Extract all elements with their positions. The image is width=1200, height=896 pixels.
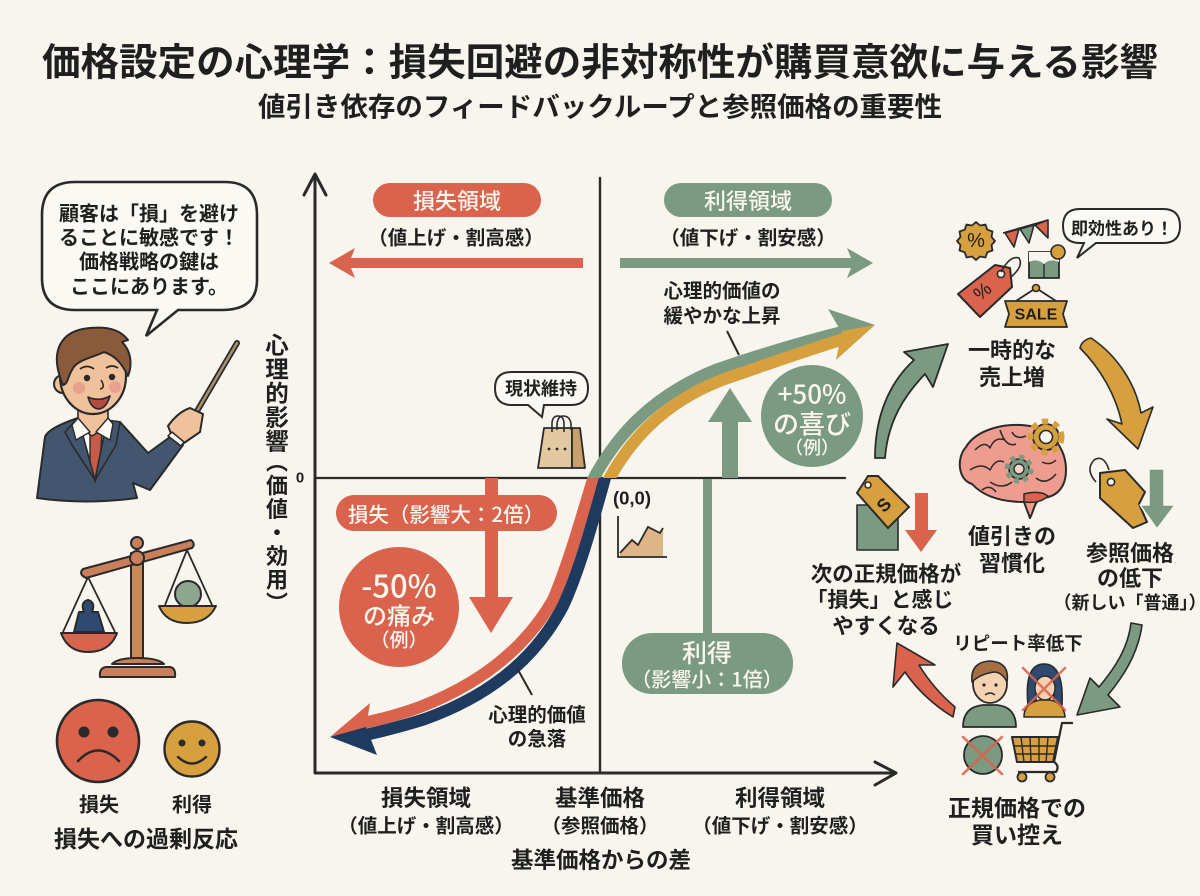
icon: happy face bbox=[164, 722, 220, 776]
speech bubble: immediate effect: 即効性あり！ bbox=[1071, 214, 1173, 240]
gain impact label: （影響小：1倍） bbox=[631, 664, 783, 692]
label: holding back at regular price bbox=[948, 789, 1086, 850]
value curve: gain side bbox=[590, 309, 875, 488]
callout: sharp fall: 心理的価値 bbox=[488, 698, 586, 728]
speech bubble: presenter: 価格戦略の鍵は bbox=[79, 246, 219, 274]
label: reference price drop: の低下 bbox=[1097, 561, 1163, 593]
axis labels: reference price: 基準価格 bbox=[555, 781, 645, 813]
gain impact label bbox=[622, 633, 793, 694]
callout circle: plus 50 percent: +50% bbox=[778, 374, 846, 412]
chart axes bbox=[304, 174, 896, 785]
loss region header: 損失領域 bbox=[413, 184, 501, 216]
label: gain: 利得 bbox=[172, 788, 212, 818]
callout circle: minus 50 percent bbox=[339, 547, 459, 667]
caption: overreaction to loss: 損失への過剰反応 bbox=[54, 820, 238, 854]
callout: gentle rise bbox=[663, 274, 781, 355]
y axis label: （価値・効用） bbox=[261, 451, 293, 615]
gain region header bbox=[660, 183, 836, 250]
axis labels: gain region bbox=[692, 781, 868, 838]
callout: sharp fall: の急落 bbox=[508, 722, 567, 752]
callout circle: plus 50 percent: の喜び bbox=[773, 404, 851, 442]
callout circle: plus 50 percent: （例） bbox=[785, 434, 839, 460]
speech bubble: presenter: ることに敏感です！ bbox=[59, 222, 239, 250]
label: next regular price feels like loss bbox=[806, 558, 962, 640]
label: repeat rate drop: リピート率低下 bbox=[953, 630, 1083, 656]
axis labels: reference price: （参照価格） bbox=[541, 810, 659, 838]
label: holding back at regular price: 正規価格での bbox=[948, 789, 1086, 823]
label: discount habit: 習慣化 bbox=[979, 546, 1045, 578]
label: next regular price feels like loss: 次の正規価格が bbox=[811, 558, 962, 588]
icon group: temporary sale: % bbox=[970, 278, 996, 305]
axis labels: loss region bbox=[338, 781, 514, 838]
callout: gentle rise: 緩やかな上昇 bbox=[663, 300, 781, 328]
label: temporary sales increase: 売上増 bbox=[979, 360, 1045, 392]
axis labels: loss region: 損失領域 bbox=[381, 781, 471, 813]
arrow: loss direction bbox=[329, 248, 583, 278]
gain region header: （値下げ・割安感） bbox=[660, 222, 836, 250]
label: temporary sales increase: 一時的な bbox=[968, 333, 1056, 365]
callout circle: minus 50 percent: （例） bbox=[370, 626, 428, 652]
speech bubble: immediate effect bbox=[1063, 209, 1180, 258]
label: next regular price feels like loss: 「損失」と感じ bbox=[806, 584, 954, 614]
cycle arrow: green up bbox=[875, 344, 948, 458]
axis labels: reference price bbox=[541, 781, 659, 838]
icon: crossed-out customer bbox=[1023, 664, 1065, 717]
axis labels: loss region: （値上げ・割高感） bbox=[338, 810, 514, 838]
gain region header: 利得領域 bbox=[704, 184, 792, 216]
callout: sharp fall bbox=[488, 668, 586, 752]
speech bubble: presenter bbox=[42, 182, 257, 336]
icon: crossed-out face bbox=[963, 736, 1002, 774]
speech bubble: presenter: ここにあります。 bbox=[70, 270, 228, 300]
origin label: (0,0) bbox=[613, 488, 651, 508]
loss impact label: 損失（影響大：2倍） bbox=[348, 498, 544, 528]
icon: brain with gears bbox=[960, 422, 1066, 518]
x axis title: 基準価格からの差 bbox=[511, 843, 691, 875]
axis labels: gain region: （値下げ・割安感） bbox=[692, 810, 868, 838]
gain impact label: 利得 bbox=[682, 634, 732, 670]
callout circle: plus 50 percent bbox=[761, 365, 863, 467]
label: temporary sales increase bbox=[968, 333, 1056, 392]
y axis label bbox=[260, 333, 294, 615]
icon: sad face bbox=[57, 700, 139, 782]
callout: gentle rise: 心理的価値の bbox=[663, 274, 781, 304]
icon: regular price tag with loss arrow: S bbox=[873, 494, 895, 516]
zero label: 0 bbox=[296, 470, 304, 486]
icon group: temporary sale: SALE bbox=[1015, 306, 1058, 324]
callout circle: minus 50 percent: -50% bbox=[361, 562, 437, 606]
icon: balance scale bbox=[61, 537, 216, 677]
axis labels: gain region: 利得領域 bbox=[735, 781, 825, 813]
cycle arrow: red bbox=[893, 643, 955, 717]
loss region header bbox=[368, 183, 544, 250]
icon: status quo bubble and shopping bag bbox=[495, 372, 588, 468]
loss impact arrow bbox=[469, 478, 513, 633]
gain impact arrow bbox=[703, 388, 752, 635]
subtitle: 値引き依存のフィードバックループと参照価格の重要性 bbox=[258, 86, 942, 124]
label: loss: 損失 bbox=[79, 788, 119, 818]
label: next regular price feels like loss: やすくなる bbox=[832, 610, 940, 640]
icon: falling price tag bbox=[1090, 458, 1175, 529]
cycle arrow: green down bbox=[1077, 623, 1142, 715]
callout circle: minus 50 percent: の痛み bbox=[363, 596, 435, 632]
title: 価格設定の心理学：損失回避の非対称性が購買意欲に与える影響 bbox=[42, 32, 1158, 86]
cycle arrow: gold bbox=[1080, 338, 1153, 449]
icon group: temporary sale: % bbox=[967, 230, 985, 252]
label: discount habit: 値引きの bbox=[968, 519, 1056, 551]
icon: sad customer bbox=[963, 661, 1016, 727]
speech bubble: presenter: 顧客は「損」を避け bbox=[59, 198, 239, 226]
loss region header: （値上げ・割高感） bbox=[368, 222, 544, 250]
label: holding back at regular price: 買い控え bbox=[971, 816, 1063, 850]
y axis label: 心理的影響 bbox=[260, 333, 294, 453]
icon group: temporary sale bbox=[957, 220, 1067, 327]
label: reference price drop: 参照価格 bbox=[1086, 536, 1174, 568]
value curve: loss side bbox=[330, 466, 609, 755]
icon: status quo bubble and shopping bag: 現状維持 bbox=[505, 375, 577, 401]
icon: presenter with pointer bbox=[37, 328, 237, 502]
label: reference price drop bbox=[1054, 536, 1200, 615]
icon: shopping cart bbox=[1012, 723, 1073, 782]
label: discount habit bbox=[968, 519, 1056, 578]
arrow: gain direction bbox=[620, 248, 873, 278]
icon: mini line chart bbox=[618, 516, 667, 557]
icon: regular price tag with loss arrow bbox=[857, 476, 937, 552]
